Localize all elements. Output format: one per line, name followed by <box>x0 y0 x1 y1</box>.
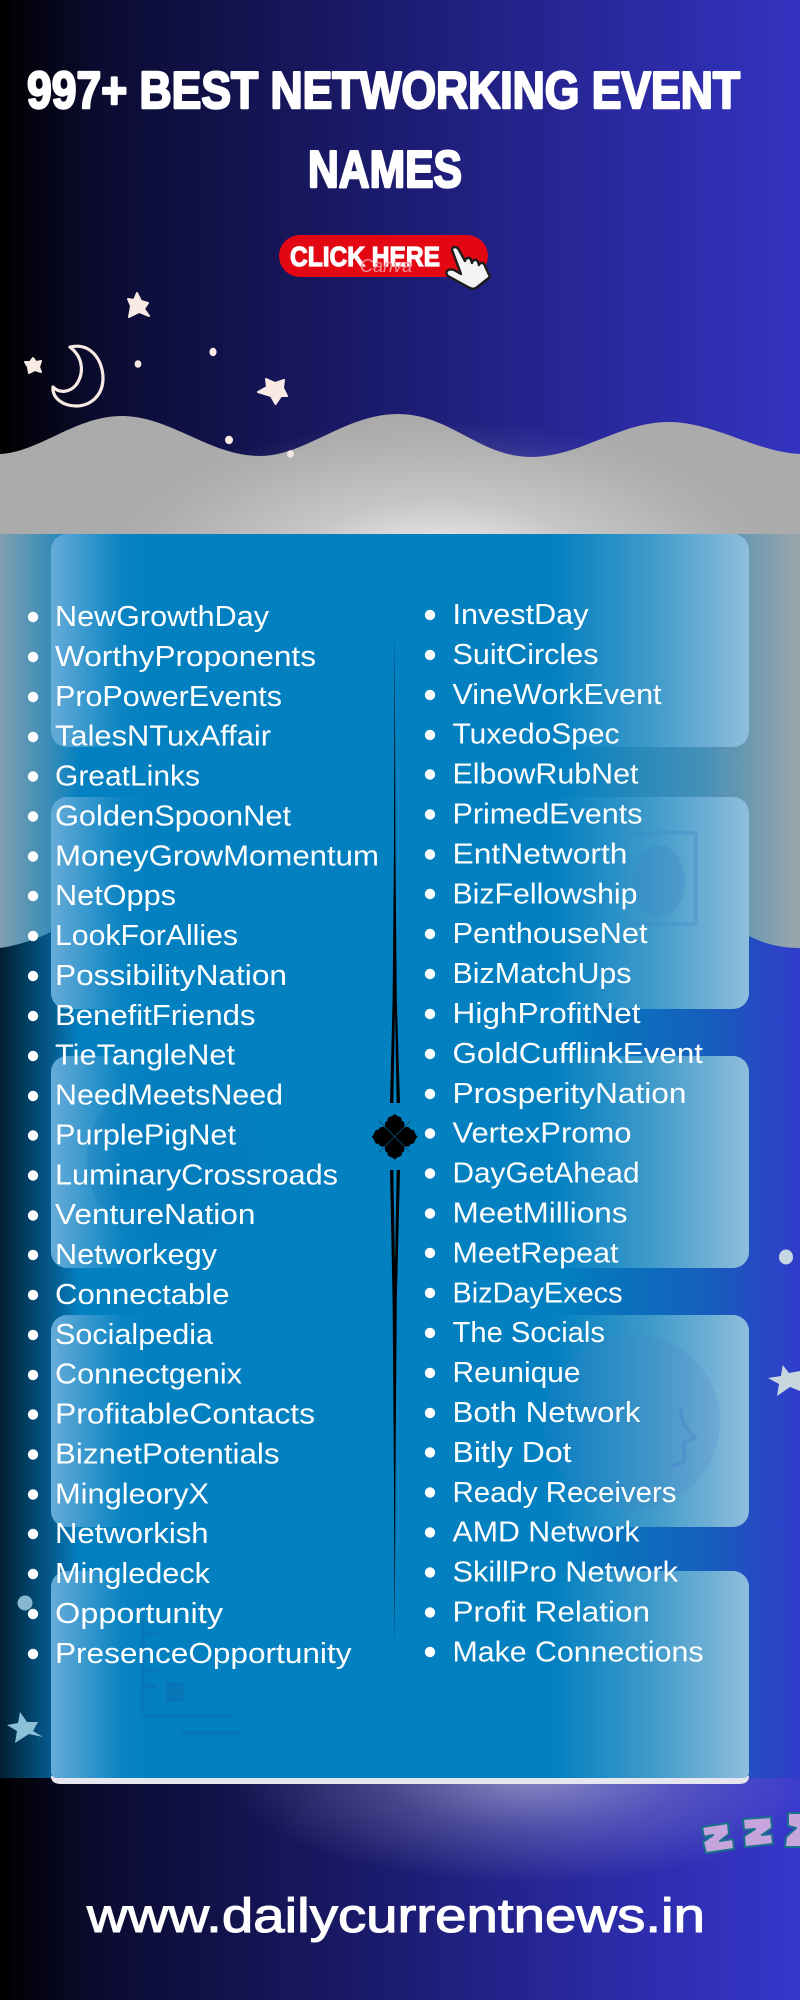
footer glow <box>230 1778 800 1884</box>
list: right column: BizMatchUps <box>452 958 632 990</box>
list: right column: Make Connections <box>452 1636 704 1668</box>
list: left column: Networkish <box>55 1518 208 1550</box>
footer background <box>0 1778 800 2000</box>
list: right column: VertexPromo <box>452 1118 632 1150</box>
ornament <box>372 1114 418 1160</box>
list: left column: TalesNTuxAffair <box>55 721 271 753</box>
list: left column: PurplePigNet <box>55 1119 236 1151</box>
list: left column: LuminaryCrossroads <box>55 1159 338 1191</box>
panel five lower edge <box>51 1762 749 1778</box>
list: left column: NewGrowthDay <box>55 601 270 633</box>
list: right column: Ready Receivers <box>452 1477 676 1509</box>
list: left column: Socialpedia <box>55 1319 214 1351</box>
list: right column: SuitCircles <box>452 639 598 671</box>
list: right column: The Socials <box>452 1317 605 1349</box>
button: click here: CLICK HERE <box>290 241 440 272</box>
list: right column: AMD Network <box>452 1517 640 1549</box>
list: right column: MeetRepeat <box>452 1237 618 1269</box>
list: left column <box>55 601 379 1670</box>
middle background: dark lower band <box>0 534 800 1778</box>
bullets: right column <box>425 610 435 1657</box>
list: right column: TuxedoSpec <box>452 719 620 751</box>
list: left column: PossibilityNation <box>55 960 287 992</box>
list: left column: ProPowerEvents <box>55 681 282 713</box>
list: left column: MingleoryX <box>55 1478 209 1510</box>
title: NAMES <box>308 141 462 199</box>
list: right column: PrimedEvents <box>452 798 642 830</box>
list: right column: InvestDay <box>452 599 589 631</box>
list: right column: Both Network <box>452 1397 641 1429</box>
list: right column: BizDayExecs <box>452 1277 622 1309</box>
list: right column <box>452 599 704 1668</box>
title <box>27 62 740 199</box>
stars and dots <box>25 293 294 458</box>
glow over wave <box>0 400 800 534</box>
list: right column: MeetMillions <box>452 1198 628 1230</box>
list: left column: NetOpps <box>55 880 176 912</box>
button: click here: Canva <box>360 256 412 276</box>
list: left column: TieTangleNet <box>55 1040 235 1072</box>
icon: moon <box>53 346 103 406</box>
list: right column: EntNetworth <box>452 838 628 870</box>
grey wave <box>0 414 800 534</box>
list: right column: VineWorkEvent <box>452 679 662 711</box>
panel bottom lip <box>51 1776 749 1784</box>
list: left column: VentureNation <box>55 1199 256 1231</box>
list: left column: ProfitableContacts <box>55 1399 315 1431</box>
list: right column: SkillPro Network <box>452 1557 679 1589</box>
list: left column: BenefitFriends <box>55 1000 256 1032</box>
list: left column: MoneyGrowMomentum <box>55 840 379 872</box>
button: click here <box>279 235 490 289</box>
list: left column: Connectgenix <box>55 1359 243 1391</box>
list: left column: Networkegy <box>55 1239 218 1271</box>
list: right column: GoldCufflinkEvent <box>452 1038 703 1070</box>
middle background: blue overlay <box>0 534 800 1778</box>
list: right column: HighProfitNet <box>452 998 640 1030</box>
list: right column: BizFellowship <box>452 878 638 910</box>
icon: faint monitor <box>143 1631 182 1700</box>
list: left column: PresenceOpportunity <box>55 1638 352 1670</box>
divider line <box>390 627 400 1647</box>
icon: pointing hand <box>446 247 490 289</box>
list: right column: DayGetAhead <box>452 1158 640 1190</box>
list: right column: Reunique <box>452 1357 580 1389</box>
icon: faint circle in panel three <box>87 1122 97 1200</box>
list: left column: GoldenSpoonNet <box>55 800 291 832</box>
icon: sleeping zzz <box>702 1813 800 1853</box>
decorative dots and stars on the side margins <box>7 1250 800 1743</box>
bullets: left column <box>28 612 38 1659</box>
list: left column: NeedMeetsNeed <box>55 1080 283 1112</box>
list: right column: Profit Relation <box>452 1596 650 1628</box>
list: left column: GreatLinks <box>55 760 200 792</box>
list: right column: ElbowRubNet <box>452 759 638 791</box>
icon: faint moon disc <box>544 1354 720 1490</box>
list: left column: Connectable <box>55 1279 230 1311</box>
list: left column: Mingledeck <box>55 1558 211 1590</box>
list: right column: ProsperityNation <box>452 1078 686 1110</box>
background: night sky top <box>0 0 800 534</box>
list: left column: Opportunity <box>55 1598 224 1630</box>
footer website address: www.dailycurrentnews.in <box>86 1890 705 1943</box>
list: right column: PenthouseNet <box>452 918 648 950</box>
list: left column: BiznetPotentials <box>55 1438 280 1470</box>
list: right column: Bitly Dot <box>452 1437 572 1469</box>
panels <box>51 534 749 1778</box>
middle background: grey band <box>0 534 800 948</box>
list: left column: LookForAllies <box>55 920 238 952</box>
icon: faint framed face <box>630 833 696 924</box>
list: left column: WorthyProponents <box>55 641 316 673</box>
